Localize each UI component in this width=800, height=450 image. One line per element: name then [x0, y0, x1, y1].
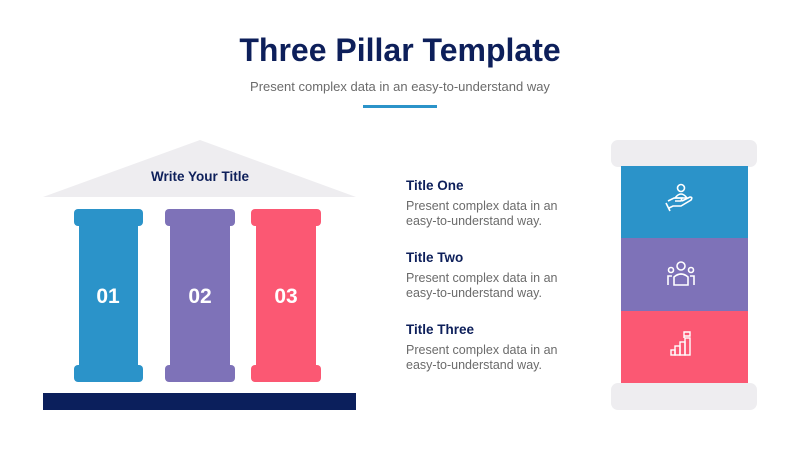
accent line [363, 105, 437, 108]
text block 1: Present complex data in an [406, 199, 557, 213]
segment purple with people icon [621, 238, 748, 311]
pillar 01: 01 [96, 285, 120, 308]
text block 1: easy-to-understand way. [406, 214, 542, 228]
title: Three Pillar Template [239, 32, 561, 68]
pillar 01 [74, 209, 143, 382]
text block 3: Present complex data in an [406, 343, 557, 357]
text block 3: easy-to-understand way. [406, 358, 542, 372]
pillar 02 [165, 209, 235, 382]
base [43, 393, 356, 410]
text block 2: Present complex data in an [406, 271, 557, 285]
text block 2 [406, 250, 557, 300]
segment red with chart icon [621, 311, 748, 383]
text block 3 [406, 322, 557, 372]
text block 1: Title One [406, 178, 464, 193]
subtitle: Present complex data in an easy-to-understand way [250, 79, 550, 94]
text block 2: easy-to-understand way. [406, 286, 542, 300]
temple graphic [43, 140, 356, 410]
text block 1 [406, 178, 557, 228]
segment blue with hand icon [621, 166, 748, 239]
roof [43, 140, 356, 197]
pillar 03: 03 [274, 285, 298, 308]
text block 3: Title Three [406, 322, 474, 337]
right pillar [611, 140, 757, 410]
roof: Write Your Title [151, 169, 249, 184]
pillar 03 [251, 209, 321, 382]
pillar 02: 02 [188, 285, 212, 308]
text block 2: Title Two [406, 250, 463, 265]
